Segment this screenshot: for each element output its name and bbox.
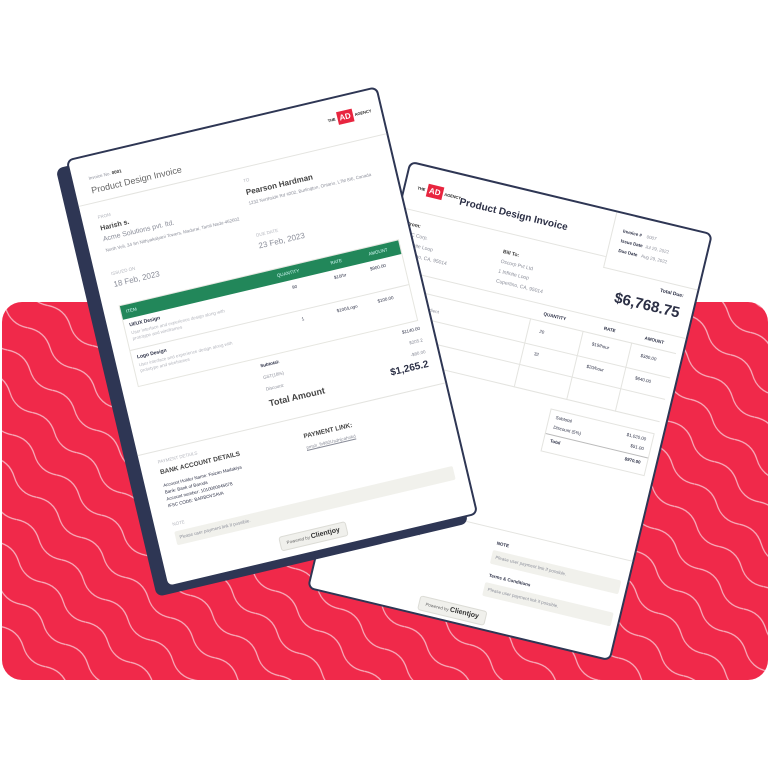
- items table: $100/Logo: [336, 304, 358, 313]
- subtotals: $1,265.2: [389, 359, 430, 379]
- bill to: [495, 249, 543, 295]
- payment details: PAYMENT DETAILS: [157, 450, 198, 465]
- note right: NOTE: [496, 541, 510, 548]
- powered by left: [278, 521, 348, 552]
- items table: 1: [301, 316, 305, 322]
- panel: left invoice: Acme Solutions pvt. ltd.: [102, 220, 175, 243]
- title right: Product Design Invoice: [458, 197, 569, 233]
- table right: $640.00: [635, 375, 652, 384]
- table right: $380.00: [640, 353, 657, 362]
- meta info: Invoice # 0007: [623, 229, 657, 241]
- from block: ABC Corp.: [404, 231, 428, 242]
- summary box: $51.00: [630, 443, 644, 451]
- table right: RATE: [603, 326, 616, 333]
- subtotals: [260, 326, 430, 392]
- items table: 90: [292, 284, 298, 290]
- items table: $10/hr: [333, 272, 347, 280]
- panel: left invoice: Harish s.: [100, 219, 130, 232]
- panel: right invoice: Please user payment link if possible.: [495, 555, 567, 577]
- table right: Prototype: [390, 291, 411, 301]
- due date: DUE DATE: [256, 228, 279, 238]
- bill to: 1 Infinite Loop: [498, 268, 530, 282]
- panel: left invoice: BANK ACCOUNT DETAILS: [159, 451, 241, 476]
- from block: FROM: [97, 212, 111, 220]
- logo right: [417, 184, 462, 201]
- panel: left invoice: Pearson Hardman: [245, 172, 314, 197]
- items table: [119, 239, 418, 387]
- left invoice shadow: [56, 95, 468, 597]
- table right: As requested by the client: [388, 298, 439, 315]
- subtotals: Subtotal:: [260, 359, 280, 368]
- items table: $100.00: [377, 295, 394, 304]
- summary box: Discount (5%): [553, 425, 582, 436]
- bill to: Cupertino, CA, 95014: [495, 278, 543, 295]
- logo left: AD: [338, 111, 352, 122]
- logo right: AD: [428, 186, 442, 198]
- subtotals: -$80.00: [410, 349, 426, 358]
- bill to: Bill To:: [502, 249, 520, 259]
- meta info: Due Date Aug 29, 2022: [618, 248, 668, 265]
- panel: left invoice: Product Design Invoice: [90, 164, 183, 195]
- from block: [399, 221, 447, 267]
- items table: RATE: [330, 258, 342, 265]
- terms: Terms & Conditions: [489, 573, 531, 587]
- panel: left invoice: IFSC CODE: BARBOVSAVA: [168, 490, 224, 508]
- summary box: $970.00: [624, 456, 641, 465]
- subtotals: GST(18%): [263, 370, 284, 380]
- panel: left invoice: Account number: 1010000045678: [166, 481, 233, 502]
- table right: $20/hour: [586, 364, 604, 373]
- panel: left invoice: pmsh_lh982Usdnjcahnkd: [306, 434, 356, 450]
- logo left: THE: [327, 117, 336, 123]
- items table: User interface and experience design along with prototype and wireframes: [131, 308, 225, 341]
- panel: left invoice: Please user payment link if possible.: [179, 518, 251, 540]
- from block: Cupertino, CA, 95014: [399, 250, 447, 267]
- powered by right: [417, 595, 487, 626]
- items table: AMOUNT: [368, 247, 388, 257]
- items table: $900.00: [369, 263, 386, 272]
- meta info: [618, 229, 670, 265]
- note: NOTE: [172, 519, 185, 527]
- table right: 20: [539, 329, 545, 335]
- panel: right invoice: [307, 161, 713, 661]
- panel: right invoice: $6,768.75: [613, 290, 681, 322]
- table right: [388, 275, 676, 422]
- issued on: ISSUED ON: [111, 266, 136, 276]
- payment link: PAYMENT LINK:: [303, 422, 353, 440]
- subtotals: $1140.00: [401, 326, 421, 335]
- bill to: Oscorp Pvt Ltd: [500, 259, 533, 272]
- table right: Timeframes: [393, 275, 419, 286]
- from block: 1 Infinite Loop: [401, 240, 433, 253]
- to block: TO: [243, 177, 250, 183]
- meta info: Issue Date Jul 29, 2022: [620, 238, 670, 255]
- items table: ITEM: [126, 306, 137, 314]
- subtotals: Discount:: [265, 383, 285, 392]
- summary box: [540, 408, 655, 476]
- panel: right invoice: Please user payment link if possible.: [487, 587, 559, 609]
- total due: Total Due:: [659, 288, 684, 299]
- summary box: Subtotal: [555, 415, 572, 424]
- subtotals: $205.2: [409, 337, 423, 346]
- payment link right: pmsh_jhsdasdasdasdasdasdasd: [357, 514, 421, 534]
- panel: left invoice: 18 Feb, 2023: [113, 269, 161, 289]
- powered by left: Powered by Clientjoy: [286, 527, 341, 545]
- from block: From:: [406, 221, 421, 230]
- items table: UI/UX Design: [129, 315, 161, 328]
- panel: left invoice: Bank: Bank of Baroda: [164, 480, 208, 495]
- logo right: AGENCY: [444, 192, 462, 201]
- panel: left invoice: North Veli, 34 Sri Nithyakalyani Towers, Madurai, Tamil Nadu-462602: [105, 216, 240, 253]
- table right: QUANTITY: [543, 311, 567, 321]
- logo left: AGENCY: [354, 108, 372, 117]
- panel: left invoice: Account Holder Name: Faizan Madakiya: [163, 465, 242, 488]
- panel: left invoice: 23 Feb, 2023: [258, 231, 306, 250]
- table right: 32: [533, 351, 540, 357]
- table right: AMOUNT: [644, 336, 665, 345]
- items table: Logo Design: [136, 348, 167, 361]
- invoice header: Invoice No. 0001: [88, 168, 122, 181]
- logo left: [327, 108, 372, 125]
- summary box: $1,020.00: [626, 432, 647, 442]
- summary box: Total: [550, 438, 561, 446]
- items table: User interface and experience design along with prototype and wireframes: [138, 340, 233, 373]
- panel: left invoice: [66, 86, 478, 588]
- powered by right: Powered by Clientjoy: [425, 602, 479, 620]
- table right: $19/hour: [591, 341, 610, 350]
- total amount: Total Amount: [268, 385, 326, 408]
- items table: QUANTITY: [276, 268, 300, 278]
- logo right: THE: [417, 185, 426, 192]
- panel: left invoice: 1232 Northside Rd #202, Burlington, Ontario, L7M 8I6, Canada: [248, 172, 372, 206]
